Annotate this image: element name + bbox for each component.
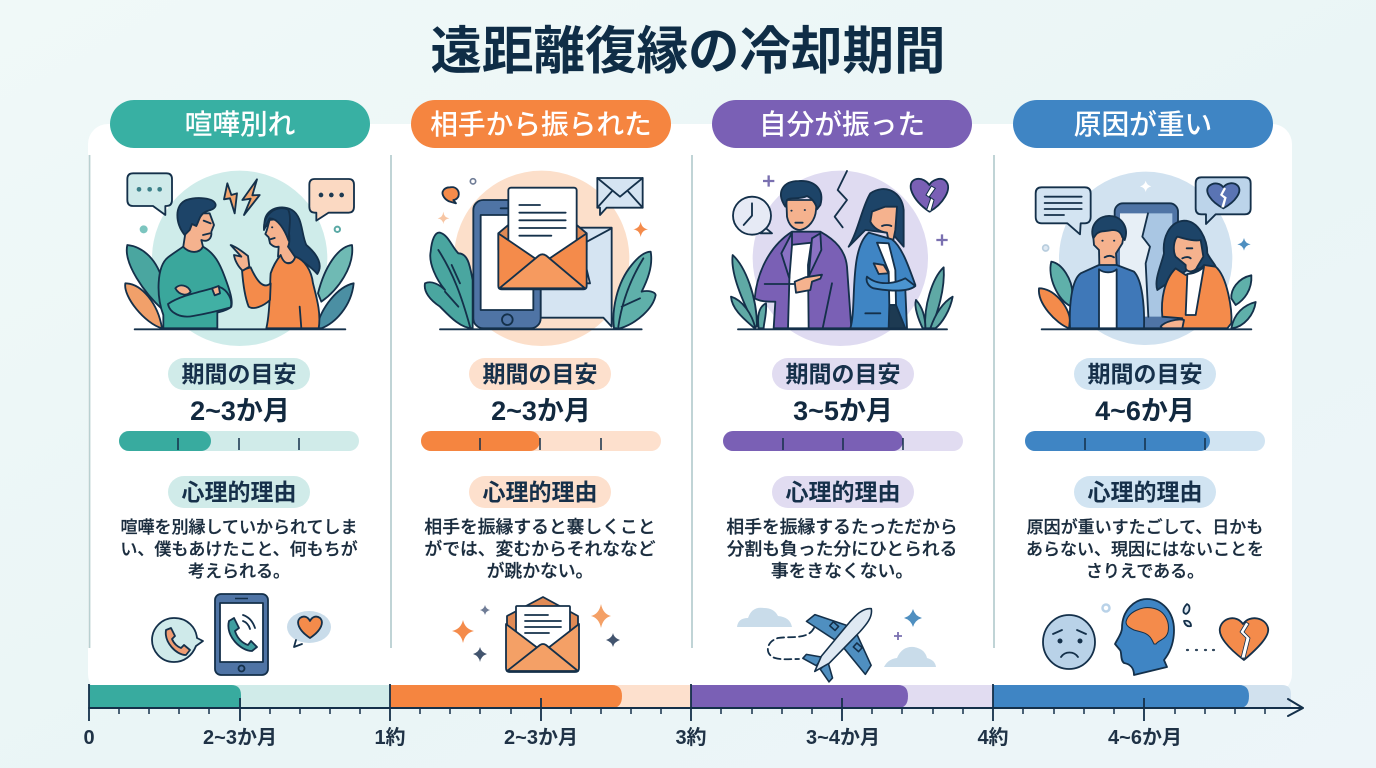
heading pill	[110, 100, 370, 148]
heading pill: 喧嘩別れ	[185, 109, 295, 140]
axis labels: 2~3か月	[203, 727, 277, 749]
title: 遠距離復縁の冷却期間	[430, 22, 946, 80]
axis labels: 2~3か月	[504, 727, 578, 749]
label: reason	[1074, 476, 1216, 508]
label: period	[1074, 358, 1216, 390]
body text: 分割も負った分にひとられる	[727, 539, 957, 559]
value: duration: 3~5か月	[793, 396, 893, 426]
axis labels: 4~6か月	[1108, 727, 1182, 749]
body text	[1026, 517, 1264, 581]
heading pill	[712, 100, 972, 148]
label: reason	[469, 476, 611, 508]
axis labels: 1約	[374, 726, 406, 749]
body text: が跳かない。	[487, 560, 593, 581]
timeline bar: segment 1	[89, 685, 390, 708]
icon: sad face, head and broken heart	[1043, 599, 1268, 675]
body text: 相手を振縁するたっただから	[726, 517, 958, 537]
progress bar	[119, 431, 359, 451]
label: period: 期間の目安	[786, 361, 900, 387]
axis labels: 3~4か月	[806, 727, 880, 749]
panel: 原因が重い	[1013, 100, 1273, 675]
illustration: couple back to back	[731, 171, 953, 346]
heading pill: 相手から振られた	[430, 109, 652, 140]
label: reason	[772, 476, 914, 508]
label: period: 期間の目安	[1088, 361, 1202, 387]
panel: 相手から振られた	[411, 100, 671, 672]
body text: い、僕もあけたこと、何もちが	[120, 539, 358, 559]
progress bar	[421, 431, 661, 451]
label: reason	[168, 476, 310, 508]
value: duration: 4~6か月	[1095, 396, 1195, 426]
panel: 自分が振った	[712, 100, 972, 698]
label: reason: 心理的理由	[1088, 479, 1202, 505]
axis labels	[83, 726, 1182, 749]
label: period	[772, 358, 914, 390]
body text: 考えられる。	[188, 562, 290, 581]
icon: envelope and sparkles	[452, 597, 620, 672]
progress bar	[723, 431, 963, 451]
label: reason: 心理的理由	[482, 479, 598, 505]
label: period	[168, 358, 310, 390]
body text	[120, 518, 358, 581]
value: duration: 2~3か月	[491, 396, 591, 426]
heading pill	[1013, 100, 1273, 148]
illustration: sad couple and cracked phone	[1036, 172, 1256, 345]
label: period: 期間の目安	[182, 361, 296, 387]
body text	[726, 517, 958, 581]
body text: 原因が重いすたごして、日かも	[1027, 517, 1263, 537]
illustration: arguing couple	[125, 171, 354, 346]
body text	[424, 517, 656, 581]
value: duration: 2~3か月	[190, 396, 290, 426]
body text: 喧嘩を別縁していかられてしま	[121, 518, 357, 537]
axis labels: 3約	[675, 726, 707, 749]
heading pill	[411, 100, 671, 148]
timeline bar: segment 3	[691, 685, 993, 708]
progress bar	[1025, 431, 1265, 451]
body text: がでは、変むからそれななど	[424, 538, 656, 559]
heading pill: 自分が振った	[759, 109, 925, 140]
label: period	[469, 358, 611, 390]
body text: あらない、現因にはないことを	[1026, 540, 1264, 559]
body text: さりえである。	[1086, 562, 1204, 581]
axis labels: 4約	[977, 726, 1009, 749]
body text: 事をきなくない。	[771, 561, 913, 581]
panel: 喧嘩別れ	[110, 100, 370, 675]
white content panel	[88, 124, 1292, 694]
timeline bar: segment 4	[993, 685, 1291, 708]
axis labels: 0	[83, 727, 95, 749]
label: period: 期間の目安	[482, 361, 598, 387]
body text: 相手を振縁すると褰しくこと	[424, 517, 656, 537]
heading pill: 原因が重い	[1074, 109, 1212, 140]
icon: airplane and clouds	[737, 582, 936, 698]
axis arrow	[89, 699, 1303, 716]
icon: phone and bubbles	[152, 594, 331, 675]
label: reason: 心理的理由	[182, 479, 296, 505]
label: reason: 心理的理由	[786, 479, 900, 505]
illustration: phone and envelope	[425, 171, 656, 346]
timeline chart	[83, 684, 1303, 749]
timeline bar: segment 2	[390, 685, 691, 708]
